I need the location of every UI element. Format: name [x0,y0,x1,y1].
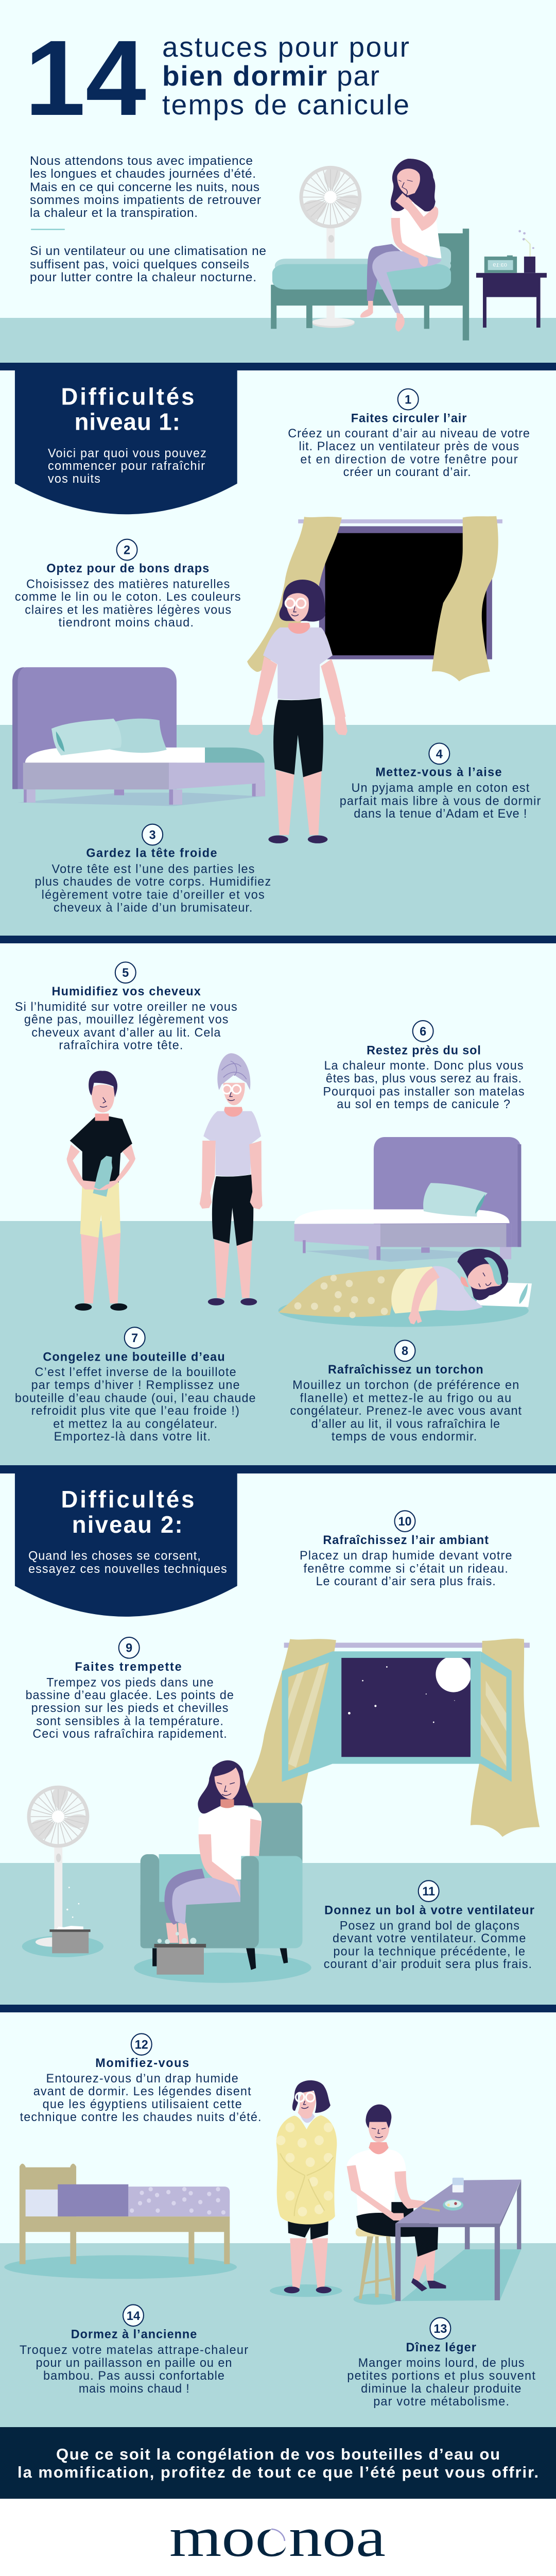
tip 13 body: diminue la chaleur produite [361,2382,521,2396]
tip 11 body [324,1919,532,1971]
tip 7 body: Emportez-là dans votre lit. [54,1430,211,1444]
tip 8 heading: Rafraîchissez un torchon [328,1363,483,1377]
number badge 3: 3 [149,828,156,842]
tip 1 body: et en direction de votre fenêtre pour [300,453,518,466]
banner text [28,1550,227,1576]
tip 13 body [347,2355,535,2409]
tip 11 body: pour la technique précédente, le [333,1945,525,1959]
tip 13 body: Manger moins lourd, de plus [358,2355,525,2370]
tip 9 body: Ceci vous rafraîchira rapidement. [32,1727,227,1741]
logo: moonoa: moonoa [169,2506,386,2568]
tip 3 body: Votre tête est l’une des parties les [52,862,254,876]
tip 14 heading: Dormez à l’ancienne [71,2327,197,2342]
title text: bien dormir par [162,60,379,92]
tip 6 body [323,1059,525,1111]
icon: fan with bowl of ice [22,1784,103,1957]
intro paragraph 2: Si un ventilateur ou une climatisation ne [30,244,266,258]
tip 6 body: La chaleur monte. Donc plus vous [324,1059,524,1073]
section divider 1 [0,363,556,370]
banner heading: niveau 2: [72,1511,183,1538]
number badge 7: 7 [131,1332,138,1345]
tip 1 [288,389,530,479]
number badge 11 [419,1880,439,1902]
number badge 9: 9 [126,1642,132,1655]
number badge 14: 14 [127,2309,141,2323]
tip 4 heading: Mettez-vous à l’aise [375,766,502,779]
number badge 12: 12 [135,2038,148,2052]
tip 10 [300,1511,512,1588]
number badge 10: 10 [398,1515,412,1529]
tip 2 body: claires et les matières légères vous [25,603,231,617]
tip 3 heading: Gardez la tête froide [86,846,217,860]
tip 3 body [34,862,271,915]
floor band: tips 5 to 8 [0,1221,556,1465]
tip 5 body [15,1001,237,1053]
banner: level 2 [15,1473,237,1617]
tip 9 body: Trempez vos pieds dans une [46,1676,214,1689]
tip 11 body: courant d’air produit sera plus frais. [324,1958,532,1971]
tip 3 [34,824,271,915]
tip 7 body: C’est l’effet inverse de la bouillote [34,1366,236,1379]
number badge 1 [398,389,419,410]
tip 1 heading: Faites circuler l’air [351,412,466,425]
tip 8 body: temps de vous endormir. [332,1430,477,1444]
tip 9 heading: Faites trempette [75,1660,182,1674]
nightstand with clock and vase: 03:19 [493,263,507,268]
tip 14 [20,2304,248,2396]
closing message: la momification, profitez de tout ce que l’été peut vous offrir. [18,2463,538,2481]
illustration: open window at night [245,1638,540,1837]
tip 7 [15,1327,256,1444]
tip 7 body: refroidit plus vite que l’eau froide !) [31,1404,239,1418]
number badge 3 [142,824,163,845]
tip 1 body: Créez un courant d’air au niveau de votre [288,427,530,440]
tip 12 body: que les égyptiens utilisaient cette [43,2097,242,2111]
nightstand with clock and vase [476,230,547,328]
tip 3 body: cheveux à l’aide d’un brumisateur. [54,901,252,915]
illustration: bed [12,667,265,806]
tip 2 [15,539,241,630]
intro paragraph 1 [30,154,261,220]
number badge 8 [395,1340,415,1361]
tip 12 heading: Momifiez-vous [95,2056,189,2070]
banner heading: Difficultés [61,383,194,410]
number badge 6 [413,1021,433,1042]
figure: standing woman with glasses [249,580,348,843]
section: level 1 [12,370,541,915]
tip 14 body: bambou. Pas aussi confortable [43,2369,224,2383]
intro divider [31,229,65,230]
tip 9 [26,1637,234,1741]
tip 10 heading: Rafraîchissez l’air ambiant [323,1534,489,1547]
tip 6 heading: Restez près du sol [367,1044,481,1057]
tip 5 body: Si l’humidité sur votre oreiller ne vous [15,1001,237,1014]
tip 4 body [340,782,541,821]
tip 3 body: plus chaudes de votre corps. Humidifiez [34,875,271,889]
banner heading [61,383,194,435]
tip 1 body [288,427,530,479]
number badge 5: 5 [122,967,129,980]
tip 10 body: Placez un drap humide devant votre [300,1549,512,1563]
banner heading: Difficultés [61,1486,194,1513]
bed [271,229,469,341]
tip 9 body: sont sensibles à la température. [36,1715,223,1728]
closing message [18,2445,538,2481]
intro paragraph 2: suffisent pas, voici quelques conseils [30,258,249,272]
tip 7 body: bouteille d’eau chaude (oui, l’eau chaude [15,1392,256,1405]
tip 7 body: et mettez la au congélateur. [53,1417,217,1431]
tip 10 body [300,1549,512,1588]
number badge 4 [429,743,449,764]
tip 2 heading: Optez pour de bons draps [46,562,209,575]
number badge 2 [117,539,137,560]
big number 14: 14 [25,19,146,138]
tip 5 body: cheveux avant d’aller au lit. Cela [31,1026,221,1040]
tip 8 body: Mouillez un torchon (de préférence en [292,1379,519,1392]
footer background [0,2499,556,2576]
tip 7 body: par temps d’hiver ! Remplissez une [31,1379,240,1392]
number badge 14 [123,2304,144,2326]
floor band: intro [0,318,556,363]
number badge 2: 2 [124,544,130,557]
tip 14 body: pour un paillasson en paille ou en [36,2355,232,2370]
tip 7 body [15,1366,256,1444]
title text: temps de canicule [162,89,409,121]
number badge 12 [131,2033,152,2055]
section: tips 5 to 8 [15,962,532,1444]
illustration: wooden bed [4,2164,237,2279]
number badge 13 [430,2318,450,2339]
floor band: tips 12 to 14 [0,2243,556,2427]
tip 2 body: tiendront moins chaud. [59,616,194,630]
figure: man with water bottle [66,1071,135,1311]
floor band: level 2 [0,1863,556,2005]
banner heading [61,1486,194,1538]
section divider 2 [0,936,556,943]
tip 1 body: créer un courant d’air. [343,466,471,479]
intro paragraph 1: Mais en ce qui concerne les nuits, nous [30,180,259,194]
tip 4 body: parfait mais libre à vous de dormir [340,794,541,808]
tip 14 body: mais moins chaud ! [79,2382,189,2396]
tip 6 [323,1021,525,1111]
tip 12 [20,2033,262,2124]
title [25,19,409,138]
tip 13 body: par votre métabolisme. [373,2395,509,2409]
tip 2 body [15,578,241,630]
tip 8 [290,1340,522,1444]
tip 5 heading: Humidifiez vos cheveux [52,985,201,998]
tip 5 body: gêne pas, mouillez légèrement vos [24,1013,229,1027]
number badge 4: 4 [436,748,443,761]
tip 4 body: Un pyjama ample en coton est [352,782,530,795]
number badge 13: 13 [433,2322,447,2336]
number badge 6: 6 [420,1025,426,1039]
tip 2 body: comme le lin ou le coton. Les couleurs [15,590,241,604]
closing band [0,2427,556,2499]
tip 8 body: flanelle) et mettez-le au frigo ou au [300,1392,511,1405]
intro paragraph 1: sommes moins impatients de retrouver [30,193,261,207]
number badge 5 [115,962,136,983]
tip 14 body: Troquez votre matelas attrape-chaleur [20,2343,248,2357]
tip 8 body: congélateur. Prenez-le avec vous avant [290,1404,522,1418]
intro paragraph 2 [30,244,266,284]
banner text [48,447,206,486]
banner text: Voici par quoi vous pouvez [48,447,206,460]
tip 4 [340,743,541,821]
intro illustration: woman on bed with fan [271,159,547,341]
intro paragraph 2: pour lutter contre la chaleur nocturne. [30,270,256,284]
number badge 11: 11 [422,1885,435,1899]
number badge 9 [119,1637,140,1658]
banner text: Quand les choses se corsent, [28,1550,201,1563]
tip 6 body: Pourquoi pas installer son matelas [323,1085,525,1098]
floor band: level 1 [0,725,556,936]
tip 3 body: légèrement votre taie d’oreiller et vos [42,888,265,902]
closing message: Que ce soit la congélation de vos bouteilles d’eau ou [56,2445,500,2463]
tip 5 body: rafraîchira votre tête. [59,1039,183,1053]
figure: woman sitting [360,159,441,332]
section divider 3 [0,1465,556,1473]
tip 11 heading: Donnez un bol à votre ventilateur [324,1904,534,1918]
section: level 2 [15,1473,540,1983]
banner: level 1 [15,370,237,514]
tip 12 body: avant de dormir. Les légendes disent [33,2084,251,2098]
illustration: bed and woman sleeping on the floor [279,1137,532,1327]
title text: astuces pour pour [162,31,409,63]
tip 10 body: fenêtre comme si c’était un rideau. [304,1562,508,1575]
number badge 7 [125,1327,145,1348]
icon: fan [300,164,364,328]
illustration: window with curtains [247,516,502,681]
banner text: vos nuits [48,472,100,486]
tip 2 body: Choisissez des matières naturelles [26,578,230,591]
figure: woman with towel on head [200,1053,263,1306]
number badge 10 [395,1511,415,1532]
tip 9 body: bassine d’eau glacée. Les points de [26,1689,234,1702]
intro paragraph 1: les longues et chaudes journées d’été. [30,167,256,181]
tip 13 heading: Dînez léger [406,2340,476,2354]
banner heading: niveau 1: [75,408,180,435]
section divider 4 [0,2005,556,2012]
tip 13 [347,2318,535,2409]
tip 7 heading: Congelez une bouteille d’eau [43,1350,225,1364]
tip 1 body: lit. Placez un ventilateur près de vous [299,440,519,453]
banner text: essayez ces nouvelles techniques [28,1563,227,1576]
illustration: armchair and woman soaking feet [134,1760,311,1983]
tip 12 body [20,2072,262,2124]
tip 9 body [26,1676,234,1741]
tip 13 body: petites portions et plus souvent [347,2369,535,2383]
tip 5 [15,962,237,1053]
title text [162,31,409,121]
section: tips 12 to 14 [4,2033,535,2409]
tip 8 body: d’aller au lit, il vous rafraîchira le [311,1417,500,1431]
tip 12 body: Entourez-vous d’un drap humide [46,2072,238,2086]
tip 11 body: Posez un grand bol de glaçons [340,1919,519,1933]
number badge 1: 1 [405,393,411,407]
figure: man seated at table [347,2105,521,2304]
tip 6 body: êtes bas, plus vous serez au frais. [326,1072,522,1086]
number badge 8: 8 [402,1345,408,1358]
tip 8 body [290,1379,522,1444]
intro paragraph 1: la chaleur et la transpiration. [30,206,198,220]
tip 6 body: au sol en temps de canicule ? [337,1098,510,1111]
tip 14 body [20,2343,248,2396]
tip 9 body: pression sur les pieds et chevilles [31,1702,229,1715]
tip 11 body: devant votre ventilateur. Comme [333,1932,526,1945]
banner text: commencer pour rafraîchir [48,460,205,473]
tip 11 [324,1880,534,1971]
intro paragraph 1: Nous attendons tous avec impatience [30,154,253,168]
tip 10 body: Le courant d’air sera plus frais. [316,1575,496,1588]
figure: woman wrapped in sheet [270,2080,342,2297]
tip 4 body: dans la tenue d’Adam et Eve ! [354,807,527,821]
tip 12 body: technique contre les chaudes nuits d’été. [20,2110,262,2124]
